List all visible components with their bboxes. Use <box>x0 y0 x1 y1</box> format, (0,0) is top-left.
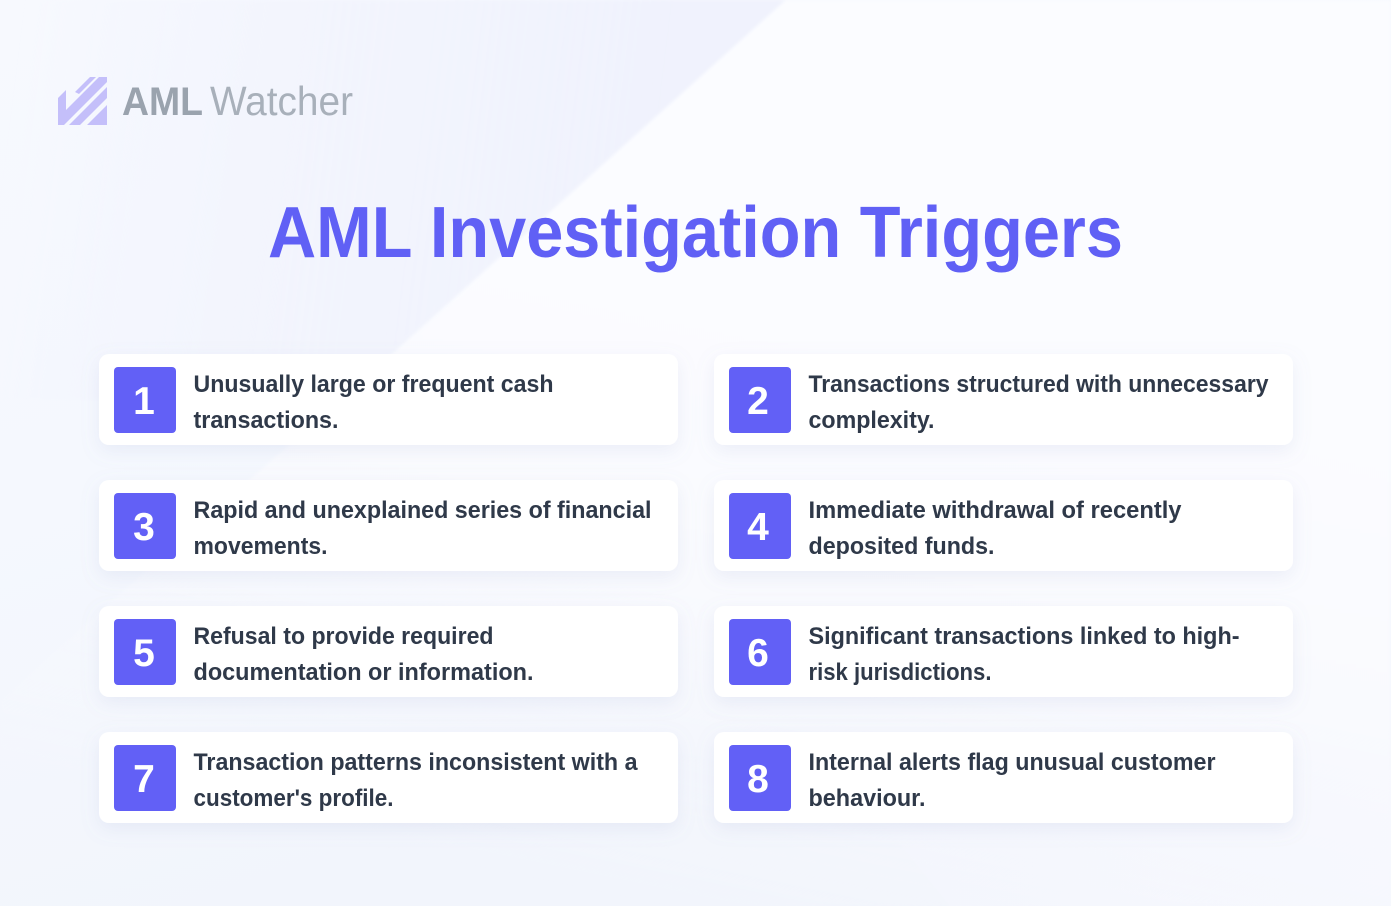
text: trigger 2: Transactions structured with unnecessary <box>808 371 1269 398</box>
number tile 8 <box>729 745 791 811</box>
text: trigger 6: Significant transactions linked to high- <box>808 623 1240 650</box>
text: trigger 3: movements. <box>194 533 328 560</box>
number tile 4 <box>729 493 791 559</box>
text: trigger 4: Immediate withdrawal of recently <box>808 497 1182 524</box>
text: trigger 1 <box>194 371 554 434</box>
panel: trigger 6 <box>714 606 1293 697</box>
panel: trigger 7 <box>99 732 678 823</box>
text: trigger 2 <box>808 371 1269 434</box>
panel: trigger 2 <box>714 354 1293 445</box>
text: trigger 8: behaviour. <box>808 785 926 812</box>
number tile 4: 4 <box>747 506 769 549</box>
text: trigger 5: Refusal to provide required <box>194 623 494 650</box>
title: AML Investigation Triggers <box>268 193 1123 273</box>
text: trigger 6 <box>808 623 1240 686</box>
panel: trigger 3 <box>99 480 678 571</box>
logo wordmark <box>122 78 353 124</box>
text: trigger 7: customer's profile. <box>194 785 394 812</box>
icon: striped logo mark <box>58 77 107 125</box>
number tile 6 <box>729 619 791 685</box>
text: trigger 6: risk jurisdictions. <box>808 659 992 686</box>
text: trigger 5 <box>194 623 534 686</box>
text: trigger 8: Internal alerts flag unusual customer <box>808 749 1216 776</box>
number tile 8: 8 <box>747 758 769 801</box>
logo: AML Watcher <box>58 77 353 125</box>
number tile 2 <box>729 367 791 433</box>
text: trigger 8 <box>808 749 1216 812</box>
text: trigger 3 <box>194 497 652 560</box>
text: trigger 1: transactions. <box>194 407 338 434</box>
number tile 3 <box>114 493 176 559</box>
text: trigger 4: deposited funds. <box>808 533 994 560</box>
number tile 1 <box>114 367 176 433</box>
number tile 6: 6 <box>747 632 769 675</box>
text: trigger 2: complexity. <box>808 407 934 434</box>
text: trigger 3: Rapid and unexplained series of financial <box>194 497 652 524</box>
number tile 5 <box>114 619 176 685</box>
panel: trigger 4 <box>714 480 1293 571</box>
text: trigger 5: documentation or information. <box>194 659 534 686</box>
logo wordmark: AML <box>122 80 203 124</box>
logo wordmark: Watcher <box>210 78 353 124</box>
panel: trigger 5 <box>99 606 678 697</box>
number tile 3: 3 <box>133 506 155 549</box>
number tile 7 <box>114 745 176 811</box>
text: trigger 1: Unusually large or frequent cash <box>194 371 554 398</box>
panel: trigger 1 <box>99 354 678 445</box>
number tile 7: 7 <box>133 758 155 801</box>
text: trigger 4 <box>808 497 1182 560</box>
text: trigger 7 <box>194 749 638 812</box>
panel: trigger 8 <box>714 732 1293 823</box>
text: trigger 7: Transaction patterns inconsistent with a <box>194 749 638 776</box>
number tile 2: 2 <box>747 380 769 423</box>
number tile 5: 5 <box>133 632 155 675</box>
number tile 1: 1 <box>133 380 155 423</box>
